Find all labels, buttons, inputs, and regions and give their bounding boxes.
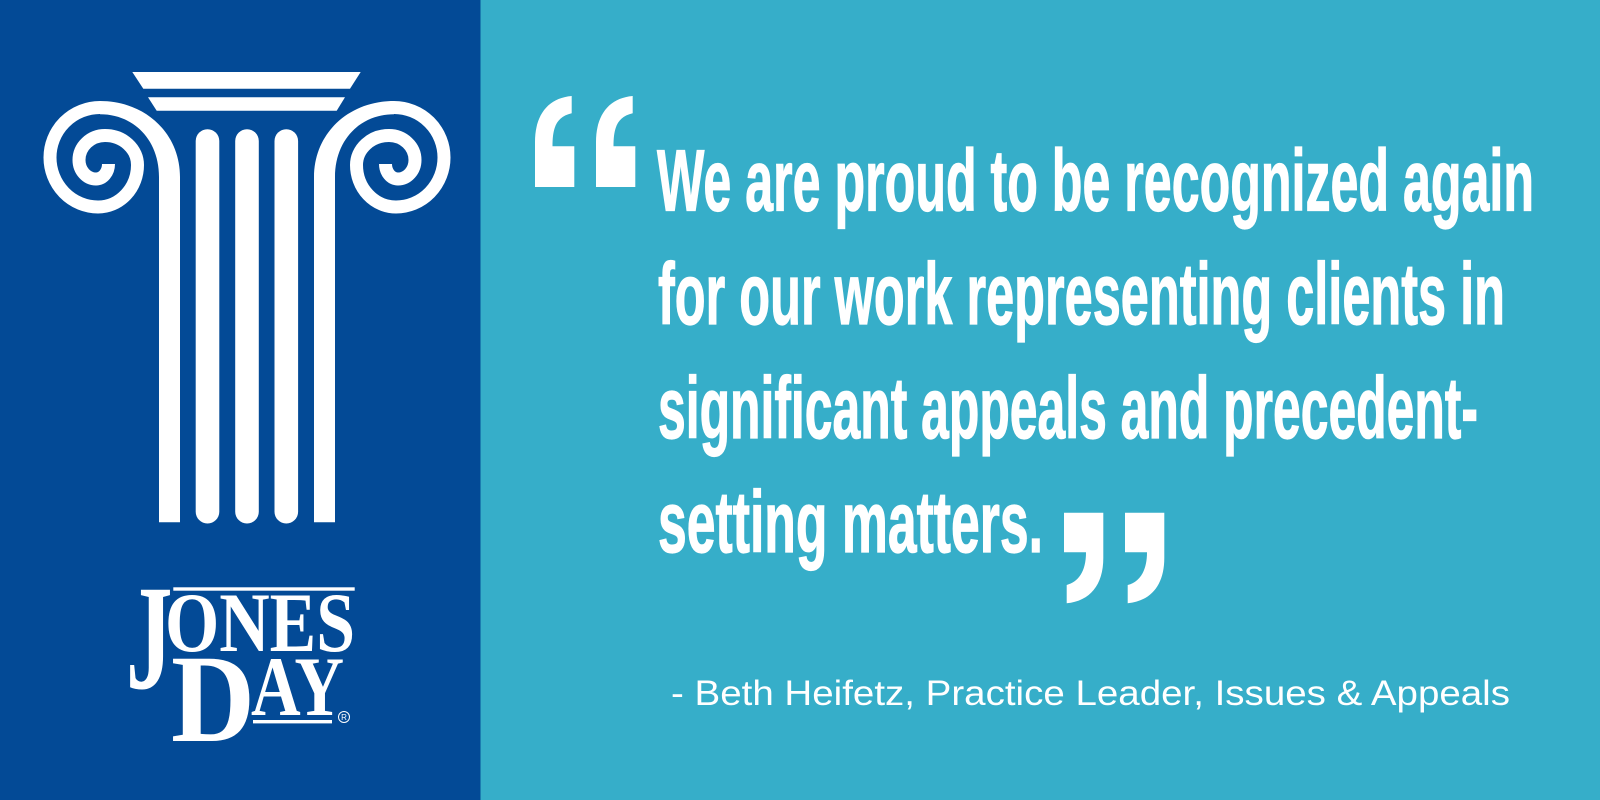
logo: Jones Day wordmark: D xyxy=(171,631,255,769)
quote text xyxy=(657,132,1534,571)
quote text: setting matters. xyxy=(658,474,1043,571)
icon: ionic column xyxy=(50,72,444,524)
attribution: - Beth Heifetz, Practice Leader, Issues & Appeals xyxy=(671,674,1510,713)
logo: Jones Day wordmark: AY xyxy=(251,640,344,734)
panel: quote background xyxy=(480,0,1600,800)
icon: closing quotation mark xyxy=(1064,513,1164,603)
panel: logo background xyxy=(0,0,480,800)
icon: opening quotation mark xyxy=(535,96,635,187)
logo: Jones Day wordmark: ONES xyxy=(165,576,355,670)
logo: Jones Day wordmark: R xyxy=(341,713,347,722)
logo: Jones Day wordmark xyxy=(126,555,355,769)
logo: Jones Day wordmark: J xyxy=(126,555,172,720)
